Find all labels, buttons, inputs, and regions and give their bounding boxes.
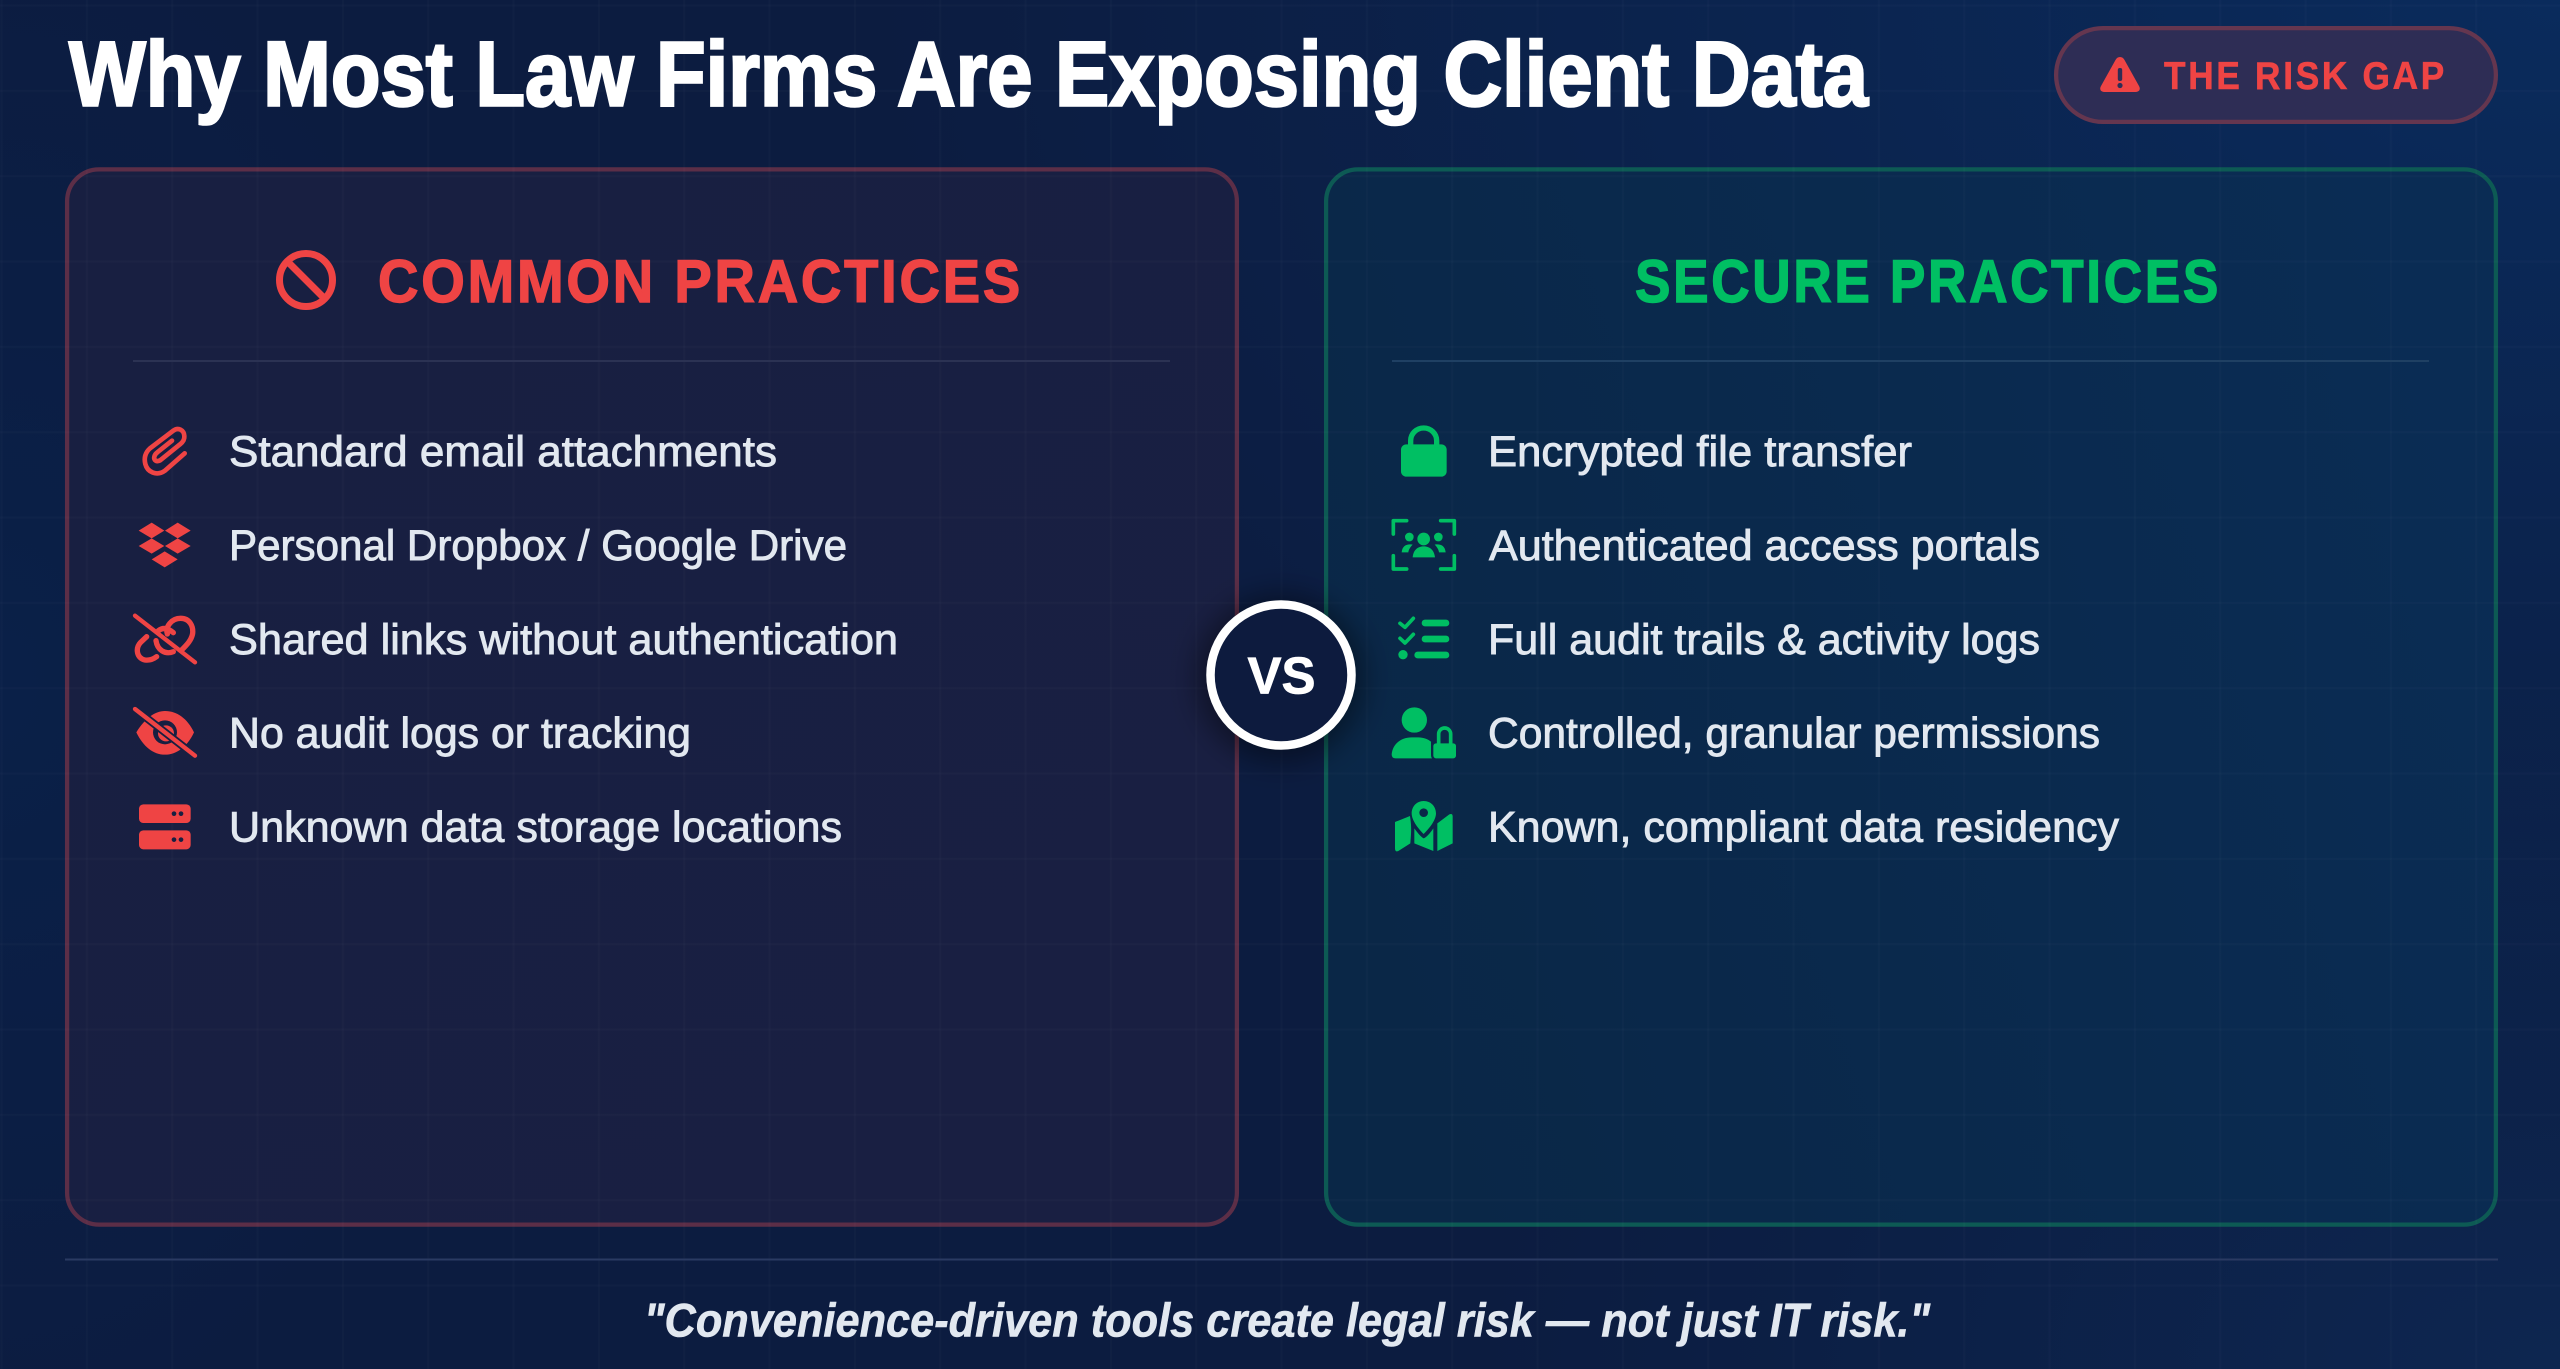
icon: lock <box>1401 428 1447 477</box>
icon: server <box>139 804 191 849</box>
vs badge <box>1197 594 1365 762</box>
icon: map location <box>1395 801 1453 851</box>
footer quote: "Convenience-driven tools create legal risk — not just IT risk." <box>644 1294 1931 1347</box>
icon: users viewfinder <box>1393 521 1454 569</box>
icon: ban <box>280 254 332 306</box>
icon: list check <box>1398 618 1449 659</box>
badge: the risk gap <box>2056 28 2496 122</box>
row: full audit trails: Full audit trails & activity logs <box>1488 616 2040 664</box>
panel: common practices <box>67 169 1237 1225</box>
row: personal dropbox / google drive: Personal Dropbox / Google Drive <box>229 522 847 570</box>
row: encrypted file transfer: Encrypted file transfer <box>1488 428 1912 476</box>
row: no audit logs or tracking: No audit logs or tracking <box>229 710 691 758</box>
row: unknown data storage locations: Unknown data storage locations <box>229 804 842 852</box>
row: shared links without authentication: Shared links without authentication <box>229 616 898 664</box>
badge label: THE RISK GAP <box>2164 55 2447 98</box>
icon: warning triangle <box>2100 57 2140 92</box>
list: common practices <box>135 428 898 852</box>
icon: user lock <box>1392 707 1456 758</box>
heading: secure practices: SECURE PRACTICES <box>1635 248 2221 315</box>
panel: secure practices <box>1326 169 2496 1225</box>
row: standard email attachments: Standard email attachments <box>229 428 777 476</box>
vs badge: VS <box>1248 647 1316 705</box>
icon: paperclip <box>145 429 185 473</box>
list: secure practices <box>1392 428 2119 852</box>
row: controlled permissions: Controlled, granular permissions <box>1488 710 2100 758</box>
heading text: COMMON PRACTICES <box>378 248 1023 315</box>
icon: dropbox <box>139 523 191 567</box>
row: authenticated access portals: Authenticated access portals <box>1489 522 2040 570</box>
title: Why Most Law Firms Are Exposing Client Data <box>69 24 1869 126</box>
heading: common practices <box>280 248 1023 315</box>
icon: link slash <box>135 616 195 662</box>
icon: eye slash <box>135 709 195 756</box>
row: compliant data residency: Known, compliant data residency <box>1488 804 2119 852</box>
